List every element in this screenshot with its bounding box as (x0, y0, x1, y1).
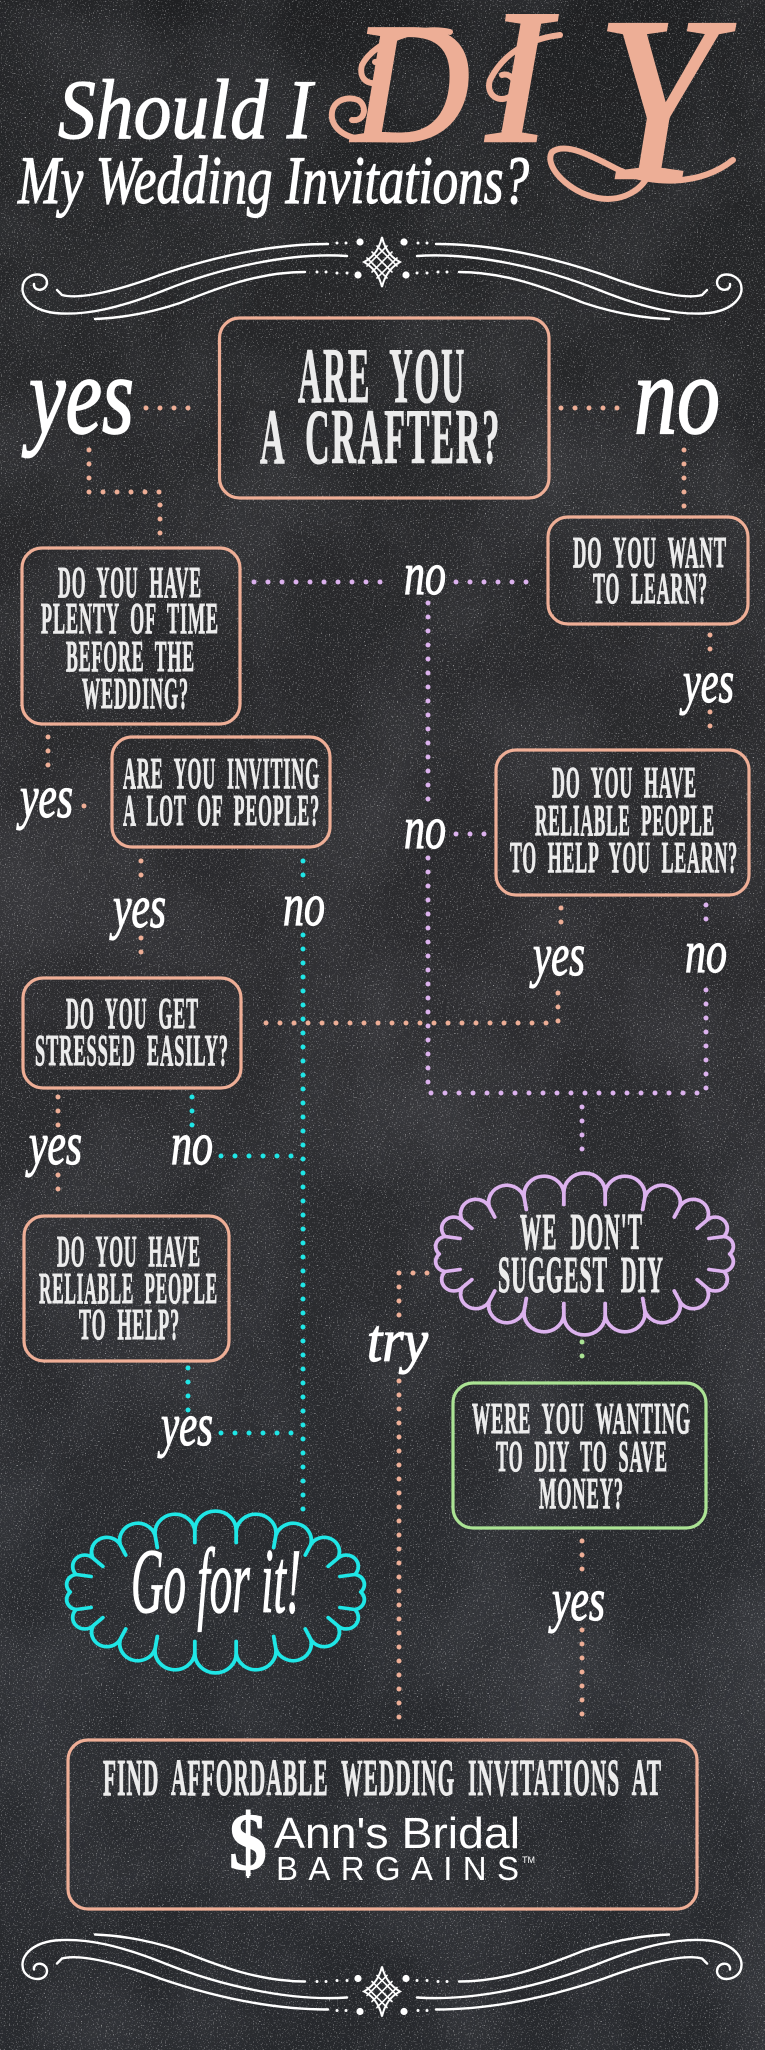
answer: yes: yes (109, 874, 166, 940)
call to action panel (68, 1740, 697, 1909)
title line: Should I: Should I (58, 63, 315, 157)
question: reliable people to help: TO HELP? (79, 1300, 180, 1349)
title (17, 0, 736, 229)
answer: no: no (283, 872, 325, 938)
bottom ornament (22, 1934, 742, 2016)
title word: DIY (350, 0, 736, 229)
cyan dotted connectors (188, 861, 303, 1517)
question: inviting a lot of people (112, 737, 330, 847)
question: plenty of time: DO YOU HAVE (58, 558, 202, 607)
chalkboard infographic: RELIABLE PEOPLE (39, 1264, 218, 1313)
answer: no: no (404, 795, 446, 861)
question: reliable people to help you learn (496, 750, 749, 895)
chalkboard infographic: STRESSED EASILY? (35, 1026, 229, 1075)
question: stressed easily: DO YOU GET (66, 989, 199, 1038)
answer: yes: yes (529, 922, 585, 988)
question: are you a crafter: ARE YOU (298, 332, 466, 419)
question: stressed easily (23, 978, 241, 1088)
salmon dotted connectors (48, 408, 710, 1727)
logo: Ann's Bridal Bargains: TM (522, 1855, 535, 1865)
result cloud: go for it (67, 1511, 364, 1673)
logo: Ann's Bridal Bargains: Ann's Bridal (274, 1809, 520, 1858)
chalkboard infographic: A LOT OF PEOPLE? (123, 786, 320, 835)
question: are you a crafter (220, 318, 549, 498)
chalkboard infographic: ARE YOU INVITING (123, 749, 320, 798)
title line: My Wedding Invitations?: My Wedding Invitations? (17, 142, 529, 218)
decorative swirls of DIY (332, 30, 733, 199)
logo: Ann's Bridal Bargains (229, 1796, 535, 1887)
green dotted connector (580, 1342, 584, 1370)
answer: no: no (685, 919, 727, 985)
question: reliable people to help (24, 1216, 229, 1361)
answer: no: no (171, 1111, 213, 1177)
question: do you want to learn (548, 517, 748, 624)
logo: Ann's Bridal Bargains: BARGAINS (276, 1850, 519, 1887)
result cloud: we don't suggest DIY (436, 1173, 733, 1335)
answer: yes: yes (679, 649, 734, 715)
chalkboard infographic: PLENTY OF TIME (41, 594, 219, 643)
answer: yes: yes (157, 1392, 213, 1458)
question: save money: MONEY? (539, 1469, 624, 1518)
answer: yes: yes (25, 1111, 82, 1177)
answer: yes: yes (548, 1567, 605, 1633)
answer: no: no (404, 541, 446, 607)
answer: big no: no (634, 334, 720, 458)
result cloud: go for it: Go for it! (131, 1530, 301, 1632)
top ornament (22, 237, 742, 319)
logo: Ann's Bridal Bargains: $ (229, 1796, 267, 1887)
answer: big yes: yes (22, 334, 134, 458)
question: save money (453, 1383, 706, 1528)
question: plenty of time (22, 548, 240, 724)
answer: yes: yes (16, 764, 73, 830)
question: plenty of time: WEDDING? (82, 669, 189, 718)
answer: try: try (367, 1308, 428, 1374)
question: plenty of time: BEFORE THE (66, 632, 195, 681)
purple dotted connectors (254, 582, 706, 1163)
chalkboard infographic: DO YOU HAVE (57, 1227, 201, 1276)
